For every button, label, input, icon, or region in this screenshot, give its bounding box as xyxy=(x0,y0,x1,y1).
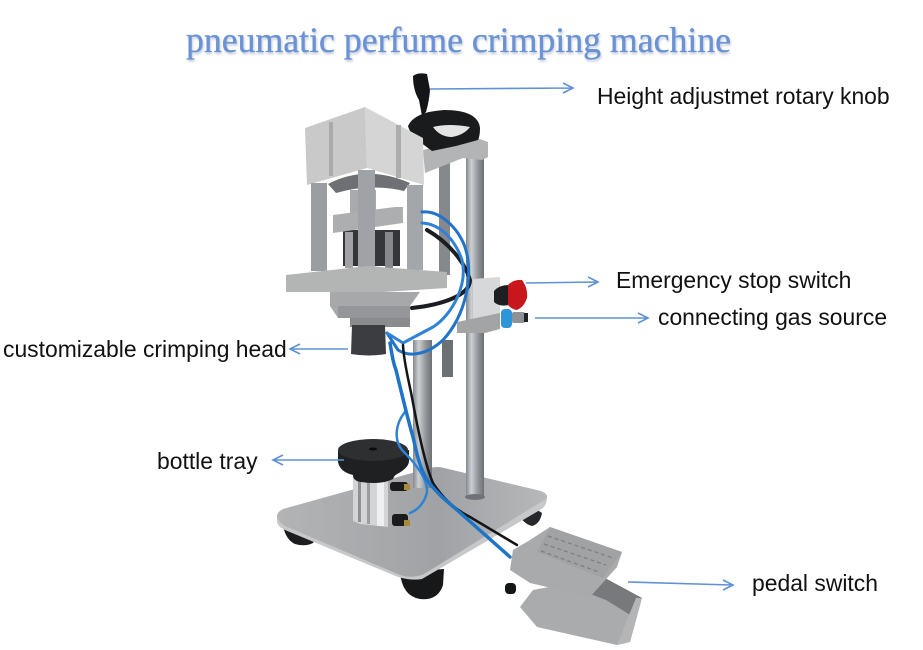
callout: customizable crimping head: customizable crimping head xyxy=(3,336,287,362)
air hoses upper xyxy=(387,212,470,354)
callout: connecting gas source xyxy=(535,304,887,330)
bottle tray xyxy=(338,439,410,527)
callout: bottle tray xyxy=(157,448,344,474)
pedal switch xyxy=(505,527,642,645)
callout: height adjustment rotary knob xyxy=(430,83,890,109)
base plate and feet xyxy=(277,467,547,599)
mid plate and head xyxy=(286,266,447,327)
callout: bottle tray: bottle tray xyxy=(157,448,258,474)
callout: connecting gas source: connecting gas source xyxy=(658,304,887,330)
callout: height adjustment rotary knob: Height adjustmet rotary knob xyxy=(597,83,890,109)
machine illustration xyxy=(277,73,642,645)
emergency stop and gas connector block xyxy=(457,277,528,333)
top bracket xyxy=(423,138,488,173)
guide rods and inner block xyxy=(311,170,423,271)
handwheel and knob xyxy=(408,73,480,151)
callout: pedal switch: pedal switch xyxy=(752,570,878,596)
callout: emergency stop switch: Emergency stop switch xyxy=(616,267,851,293)
callout: pedal switch xyxy=(628,570,878,596)
crimping head brush xyxy=(351,325,386,356)
title: pneumatic perfume crimping machine xyxy=(186,20,731,60)
air hoses lower xyxy=(390,343,517,557)
rear columns xyxy=(413,158,485,500)
cylinder block xyxy=(305,107,424,193)
